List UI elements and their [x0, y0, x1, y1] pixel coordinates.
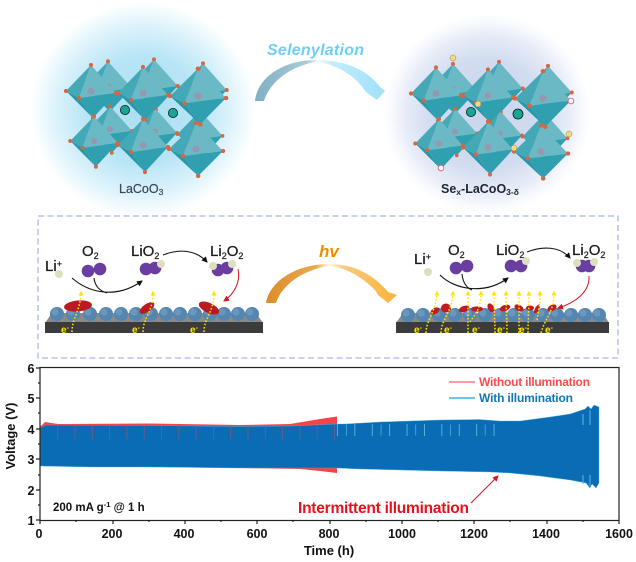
mechanism: without illumination: LiO: [131, 243, 154, 260]
mechanism: with illumination: Li: [572, 242, 584, 259]
panel: Se-LaCoO3 crystal: 3-δ: [506, 187, 519, 197]
mechanism: without illumination: 2: [154, 251, 159, 261]
arrow: selenylation: [255, 42, 385, 101]
mechanism: with illumination: O: [448, 242, 460, 259]
axes: 1000: [388, 527, 416, 541]
mechanism: without illumination: O: [227, 243, 238, 260]
axes: 1200: [460, 527, 488, 541]
mechanism: without illumination: 2: [222, 251, 227, 261]
axes: 0: [36, 527, 43, 541]
mechanism: with illumination: -: [420, 325, 423, 332]
mechanism: with illumination: -: [503, 325, 506, 332]
axes: 1600: [605, 527, 633, 541]
mechanism: with illumination: 2: [460, 250, 465, 260]
arrow: hv: hv: [319, 242, 340, 261]
chart: voltage vs time: [3, 362, 633, 558]
panel: Se-LaCoO3 crystal: x: [456, 187, 461, 197]
mechanism: with illumination: O: [589, 242, 600, 259]
mechanism: with illumination: [396, 242, 609, 336]
mechanism: without illumination: [45, 243, 263, 336]
axes: 200: [102, 527, 122, 541]
mechanism: without illumination: e: [132, 325, 138, 336]
mechanism: with illumination: e: [545, 325, 551, 336]
mechanism: with illumination: -: [478, 325, 481, 332]
axes: Voltage (V): [3, 403, 18, 469]
blue series: with illumination: [40, 405, 599, 488]
axes: 4: [28, 423, 35, 437]
axes: 1: [28, 514, 35, 528]
mechanism: without illumination: e: [190, 325, 196, 336]
axes: 3: [28, 453, 35, 467]
mechanism: with illumination: 2: [584, 250, 589, 260]
callout: intermittent illumination: Intermittent illumination: [298, 500, 469, 517]
annotation: rate: -1: [104, 500, 110, 509]
mechanism: without illumination: -: [196, 325, 199, 332]
annotation: rate: 200 mA g: [53, 502, 104, 514]
mechanism: with illumination: 2: [519, 250, 524, 260]
mechanism: without illumination: -: [138, 325, 141, 332]
mechanism: with illumination: +: [426, 252, 431, 262]
mechanism: with illumination: -: [525, 325, 528, 332]
panel: Se-LaCoO3 crystal: -LaCoO: [461, 182, 506, 196]
mechanism: without illumination: e: [61, 325, 67, 336]
arrow: selenylation: Selenylation: [267, 42, 364, 59]
mechanism: without illumination: Li: [210, 243, 222, 260]
axes: 1400: [532, 527, 560, 541]
legend: Without illumination: [479, 375, 590, 389]
legend: With illumination: [479, 391, 573, 405]
axes: 2: [28, 484, 35, 498]
mechanism: without illumination: -: [67, 325, 70, 332]
mechanism: with illumination: e: [472, 325, 478, 336]
axes: 6: [28, 362, 35, 376]
arrow: hv: [266, 242, 397, 303]
legend: [449, 375, 590, 405]
mechanism: with illumination: e: [497, 325, 503, 336]
mechanism: with illumination: e: [414, 325, 420, 336]
axes: [3, 362, 633, 558]
mechanism: without illumination: O: [82, 243, 94, 260]
axes: 600: [247, 527, 267, 541]
mechanism: without illumination: Li: [45, 258, 57, 275]
red series: without illumination: [40, 416, 337, 473]
axes: Time (h): [304, 543, 354, 558]
mechanism: without illumination: 2: [94, 251, 99, 261]
axes: 800: [319, 527, 339, 541]
axes: 400: [174, 527, 194, 541]
voltage gaps: [40, 410, 590, 486]
panel: LaCoO3 crystal: [30, 2, 256, 218]
annotation: rate: @ 1 h: [110, 502, 145, 514]
mechanism: without illumination: +: [57, 259, 62, 269]
mechanism: with illumination: LiO: [496, 242, 519, 259]
panel: LaCoO3 crystal: 3: [159, 187, 164, 197]
mechanism: with illumination: -: [551, 325, 554, 332]
mechanism: with illumination: Li: [414, 251, 426, 268]
mechanism: with illumination: -: [450, 325, 453, 332]
mechanism: with illumination: 2: [600, 250, 605, 260]
dashed panel: reaction mechanism: [38, 216, 618, 358]
callout: intermittent illumination: [298, 476, 498, 517]
panel: LaCoO3 crystal: LaCoO: [119, 182, 159, 196]
mechanism: with illumination: e: [444, 325, 450, 336]
mechanism: without illumination: 2: [238, 251, 243, 261]
panel: Se-LaCoO3 crystal: Se: [441, 182, 456, 196]
mechanism: with illumination: e: [519, 325, 525, 336]
panel: Se-LaCoO3 crystal: [383, 14, 591, 214]
axes: 5: [28, 392, 35, 406]
